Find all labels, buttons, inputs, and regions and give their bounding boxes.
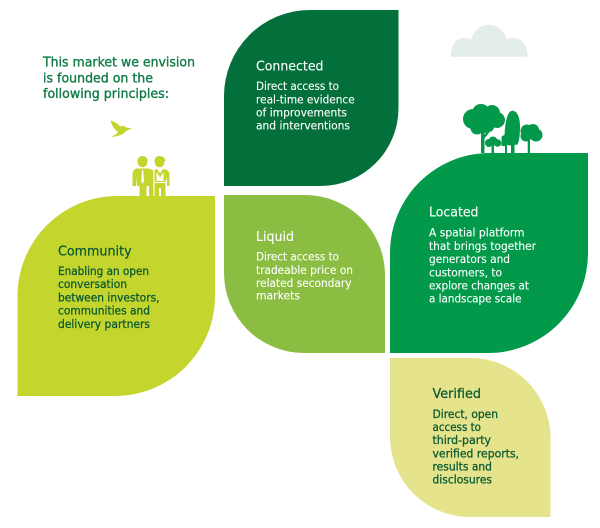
panel text: conversation (58, 278, 127, 291)
panel title: Located (429, 205, 478, 221)
panel title: Community (58, 244, 132, 260)
panel text: real-time evidence (256, 93, 355, 106)
icon: trees (463, 104, 542, 153)
panel text: generators and (429, 253, 510, 266)
panel text (58, 265, 160, 331)
panel text: explore changes at (429, 280, 530, 292)
panel text: Direct access to (256, 251, 339, 264)
panel title: Connected (256, 59, 324, 75)
panel text: tradeable price on (256, 264, 353, 277)
heading: intro text (42, 54, 195, 102)
panel text (256, 80, 355, 133)
panel text: access to (432, 421, 481, 434)
panel: Community (18, 196, 215, 396)
panel: Liquid (224, 195, 385, 353)
panel text: verified reports, (432, 448, 519, 460)
heading: intro text: is founded on the (43, 70, 153, 86)
panel text (256, 251, 353, 303)
icon: cloud (451, 25, 528, 57)
panel: Verified (390, 358, 550, 517)
panel title: Liquid (256, 229, 294, 245)
icon: two workers (132, 156, 170, 196)
panel text: disclosures (432, 474, 492, 486)
panel text: Direct access to (256, 80, 339, 93)
panel: Located (390, 153, 588, 353)
panel: Connected (224, 10, 398, 186)
panel text (429, 227, 536, 306)
panel text: results and (432, 460, 492, 474)
panel text: communities and (58, 304, 150, 318)
heading: intro text: following principles: (43, 86, 169, 102)
panel text: A spatial platform (429, 227, 524, 240)
panel text: related secondary (256, 277, 352, 290)
panel text: Direct, open (432, 408, 498, 421)
panel text (432, 408, 519, 486)
panel text: and interventions (256, 120, 350, 133)
panel text: customers, to (429, 266, 502, 279)
panel text: between investors, (58, 292, 160, 304)
panel text: delivery partners (58, 318, 150, 331)
panel text: third-party (432, 434, 491, 447)
panel text: Enabling an open (58, 265, 149, 278)
icon: bird (110, 120, 132, 137)
heading: intro text: This market we envision (42, 54, 195, 70)
panel text: that brings together (429, 240, 536, 253)
panel title: Verified (432, 386, 481, 402)
panel text: a landscape scale (429, 292, 522, 306)
panel text: of improvements (256, 106, 347, 120)
panel text: markets (256, 290, 300, 303)
